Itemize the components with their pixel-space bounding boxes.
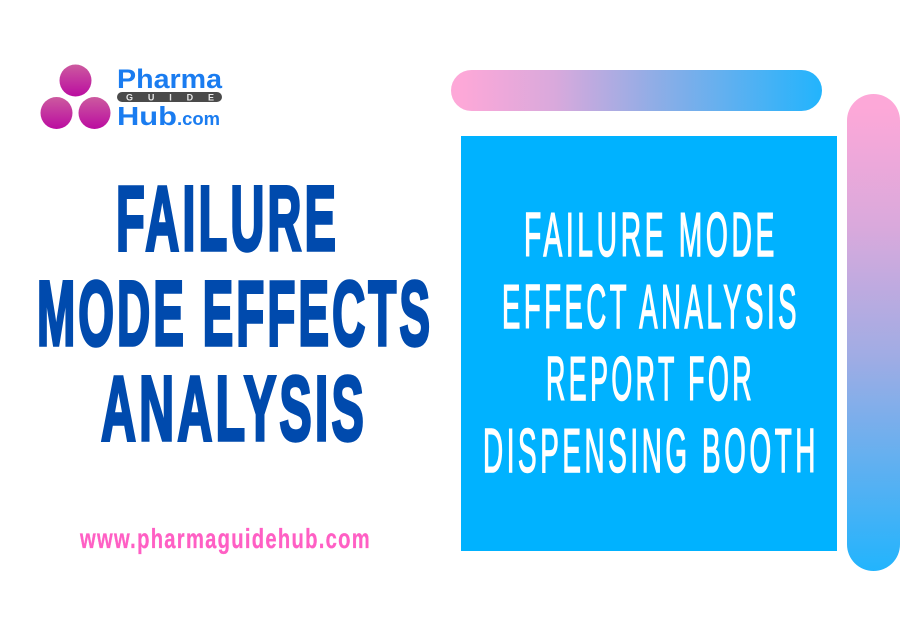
logo word: Hub.com: Hub: [117, 101, 177, 131]
left title: [37, 168, 433, 460]
vertical gradient bar: [847, 94, 900, 571]
logo: PharmaGuideHub: [40, 64, 223, 131]
logo badge: GUIDE: GUIDE: [126, 92, 214, 102]
logo word: Hub.com: .com: [177, 109, 220, 129]
panel: report title: [461, 136, 837, 551]
logo icon: three circles: [40, 64, 110, 129]
left title: FAILURE: [116, 168, 339, 270]
horizontal gradient bar: [451, 70, 822, 111]
panel text: [483, 201, 819, 486]
logo word: Hub.com: [117, 101, 220, 131]
logo word: Pharma: Pharma: [117, 64, 223, 94]
website url: www.pharmaguidehub.com: [79, 523, 371, 554]
text: MODE EFFECTS: [37, 263, 433, 365]
left title: ANALYSIS: [101, 358, 367, 460]
